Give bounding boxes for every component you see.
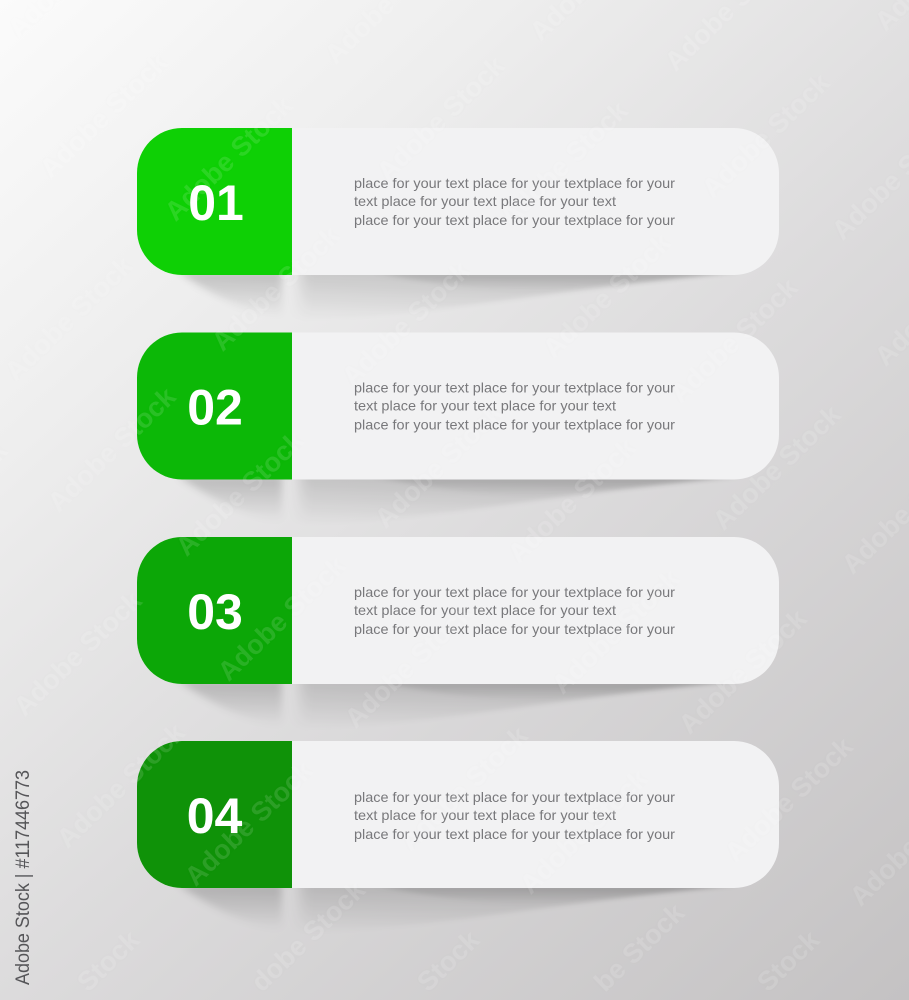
banner 04: place for your text place for your textplace for your xyxy=(354,826,675,842)
watermark pattern: Adobe Stock xyxy=(206,220,346,357)
watermark pattern: Adobe Stock xyxy=(212,550,352,687)
banner 04 xyxy=(137,741,779,934)
watermark pattern: Stock xyxy=(71,924,146,997)
stock id label: Adobe Stock | #117446773 xyxy=(13,770,34,985)
watermark pattern: be Stock xyxy=(588,897,691,997)
watermark pattern: Adobe Stock xyxy=(179,755,319,892)
watermark pattern: Adobe Stock xyxy=(8,585,148,722)
banner 01: place for your text place for your textplace for your xyxy=(354,175,675,191)
watermark pattern: Stock xyxy=(411,924,486,997)
watermark pattern: Adobe Stock xyxy=(673,603,813,740)
banner 01: text place for your text place for your text xyxy=(354,193,616,209)
watermark pattern: Adobe Stock xyxy=(51,717,191,854)
watermark pattern: dobe Stock xyxy=(245,874,372,997)
watermark pattern: Adobe Stock xyxy=(336,255,476,392)
banner 03: place for your text place for your textplace for your xyxy=(354,621,675,637)
watermark pattern: Adobe Stock xyxy=(159,90,299,227)
watermark pattern: Adobe Stock xyxy=(707,399,847,536)
watermark pattern: Adobe Stock xyxy=(34,47,174,184)
banner 02: place for your text place for your textplace for your xyxy=(354,416,675,432)
watermark pattern: Adobe Stock xyxy=(502,432,642,569)
watermark pattern: Adobe Stock xyxy=(0,250,139,387)
banner 03: 03 xyxy=(187,584,243,640)
watermark pattern: Adobe Stock xyxy=(664,272,804,409)
watermark pattern: Adobe Stock xyxy=(369,397,509,534)
banner 03 xyxy=(137,537,779,730)
banner 01: 01 xyxy=(188,175,244,231)
watermark pattern: Adobe Stock xyxy=(339,597,479,734)
watermark pattern: Adobe Stock xyxy=(696,67,836,204)
watermark pattern: Adobe Stock xyxy=(494,95,634,232)
banner 02: place for your text place for your textplace for your xyxy=(354,380,675,396)
watermark pattern: Adobe Stock xyxy=(42,381,182,518)
watermark pattern: Adobe Stock xyxy=(170,425,310,562)
banner 02: text place for your text place for your text xyxy=(354,398,616,414)
watermark pattern: Adobe Stock xyxy=(719,731,859,868)
banner 04: place for your text place for your textplace for your xyxy=(354,789,675,805)
banner 03: place for your text place for your textplace for your xyxy=(354,584,675,600)
watermark pattern: Stock xyxy=(751,924,826,997)
banner 01 xyxy=(137,128,779,321)
watermark pattern: Adobe Stock xyxy=(546,563,686,700)
watermark pattern: Adobe Stock xyxy=(514,763,654,900)
banner 03: text place for your text place for your text xyxy=(354,602,616,618)
banner 02: 02 xyxy=(187,380,243,436)
watermark pattern: Adobe Stock xyxy=(537,227,677,364)
banner 02 xyxy=(137,332,779,526)
watermark pattern: Adobe Stock xyxy=(371,50,511,187)
banner 04: 04 xyxy=(187,788,242,844)
banner 01: place for your text place for your textplace for your xyxy=(354,212,675,228)
banner 04: text place for your text place for your text xyxy=(354,807,616,823)
watermark pattern: Adobe Stock xyxy=(394,720,534,857)
